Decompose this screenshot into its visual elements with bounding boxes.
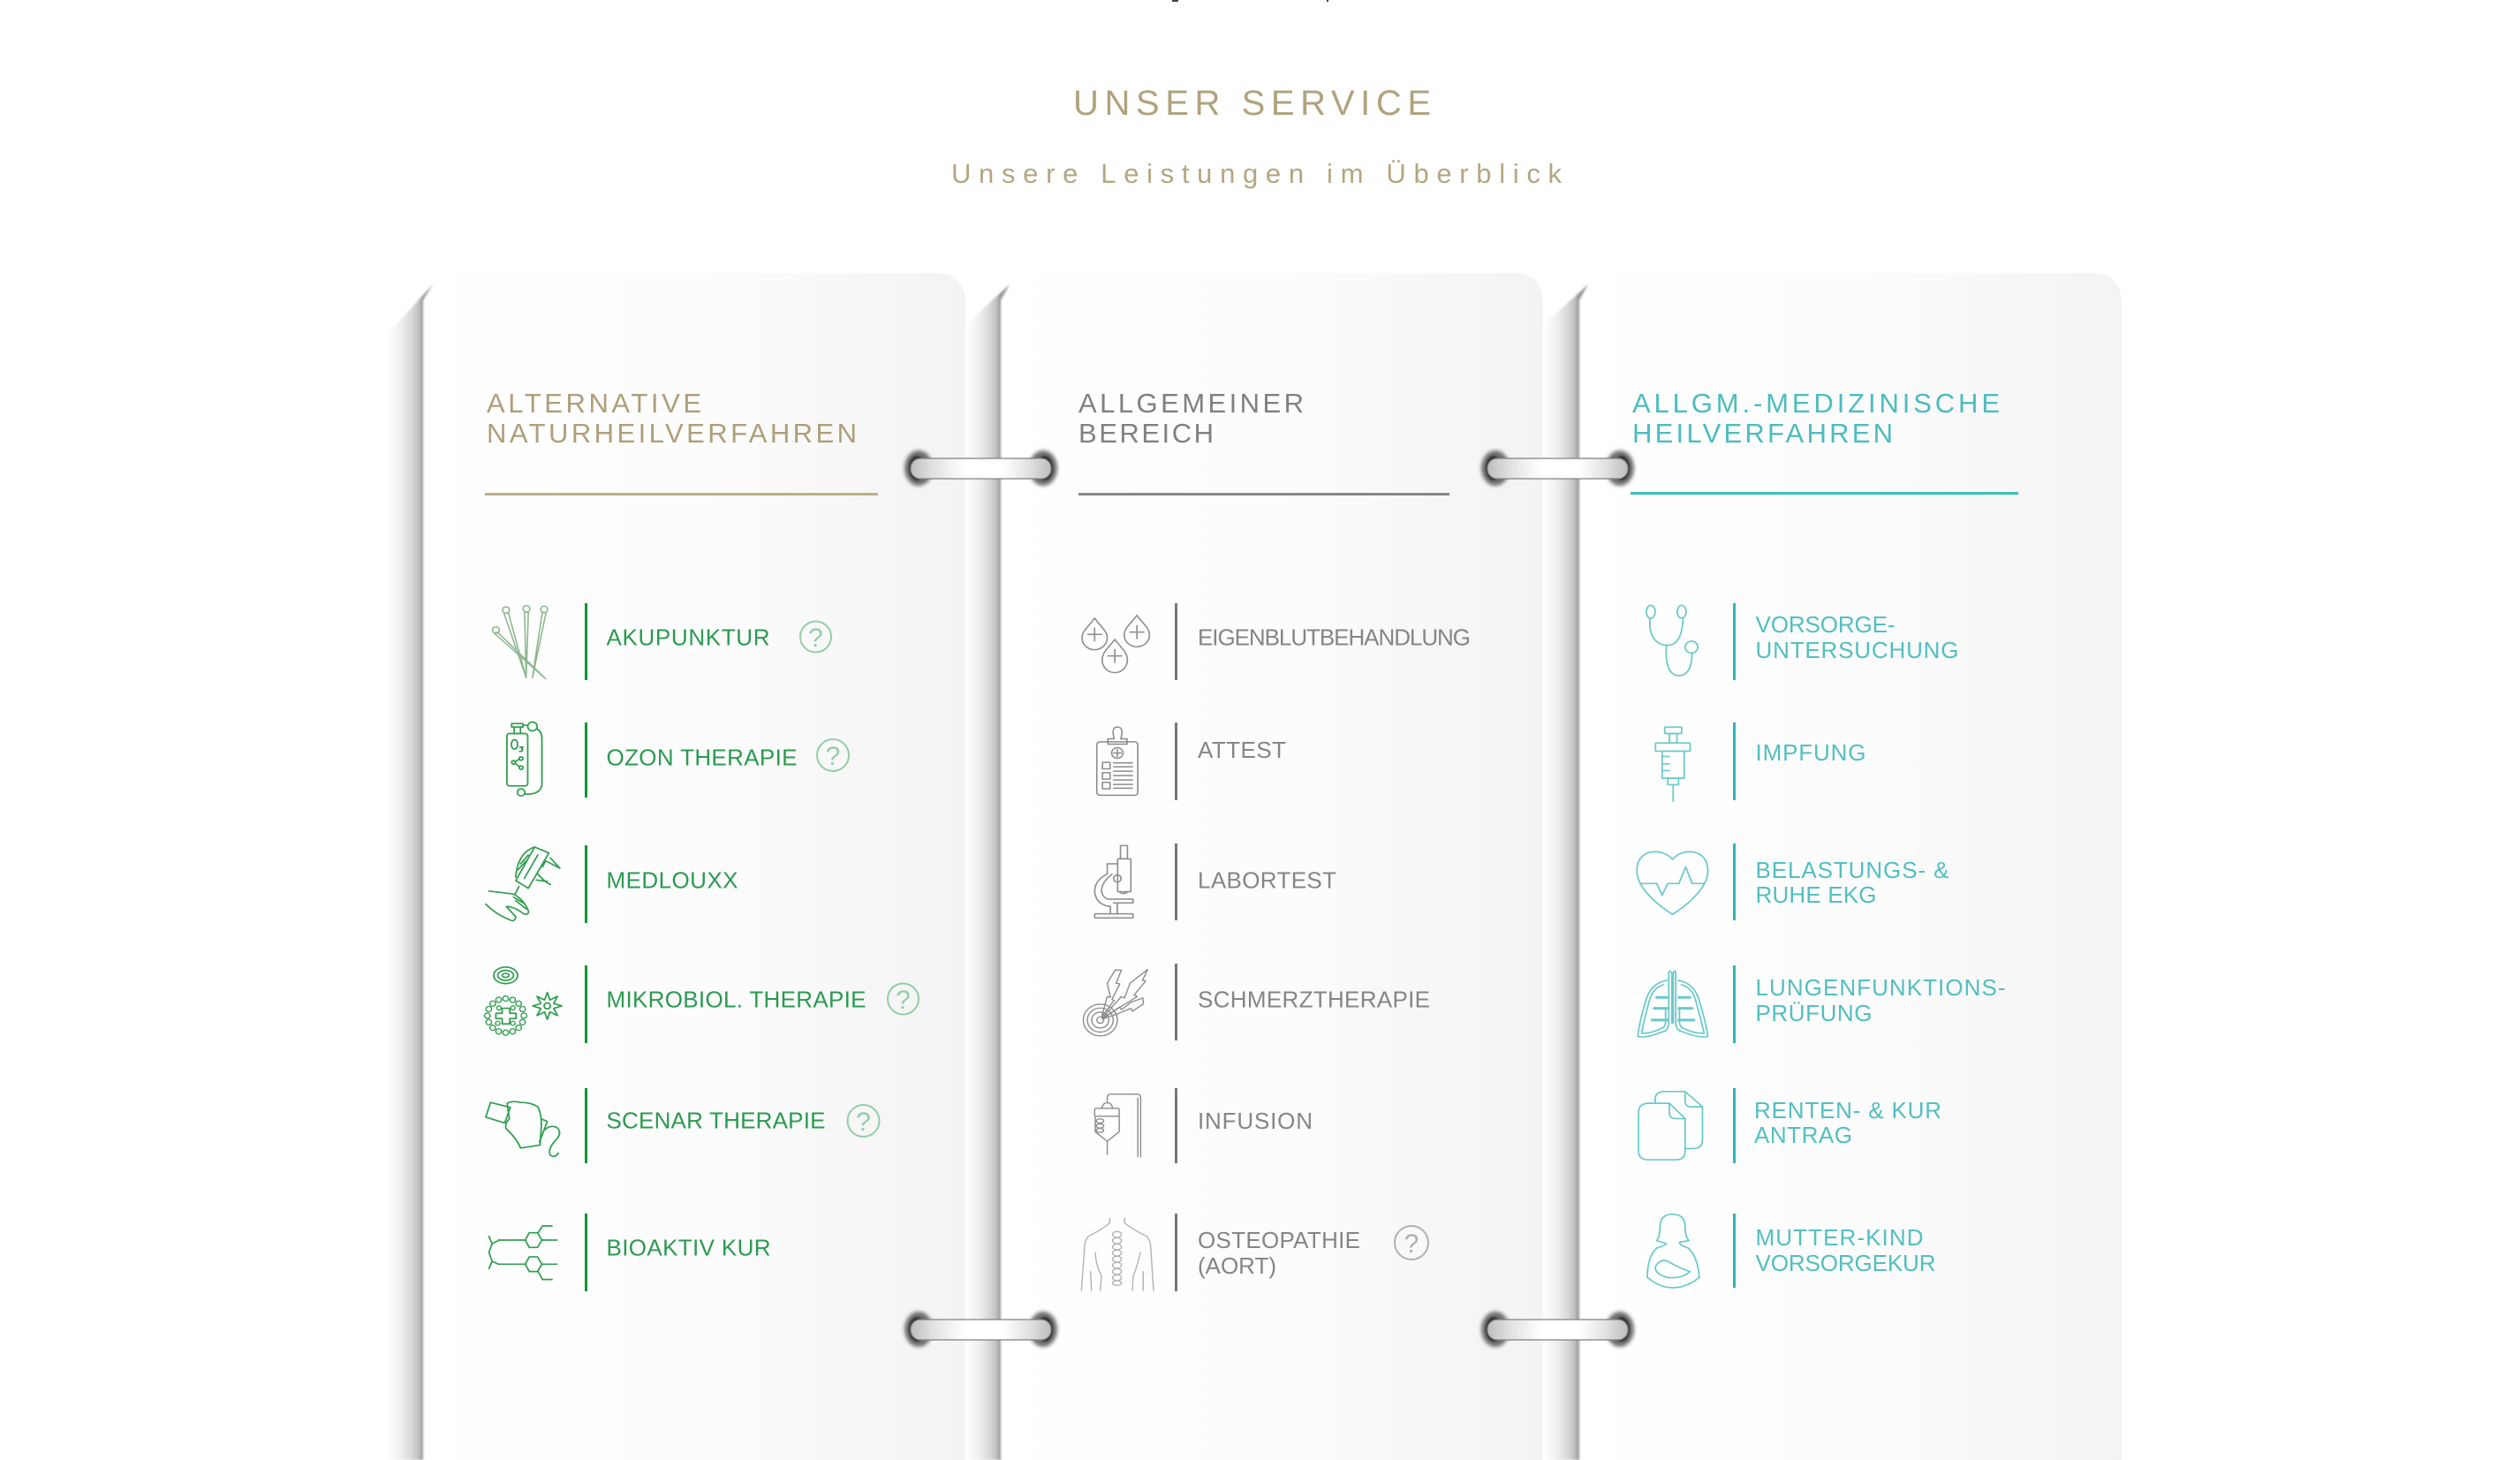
item: lungenfunktionsprüfung bbox=[1638, 965, 2005, 1043]
divider bbox=[1175, 603, 1177, 680]
help icon bbox=[817, 739, 849, 771]
label bbox=[1756, 857, 1949, 908]
heading bbox=[487, 388, 857, 449]
divider bbox=[585, 1214, 587, 1291]
icon: molecule bbox=[489, 1226, 556, 1280]
label bbox=[1756, 974, 2005, 1026]
divider bbox=[1733, 603, 1736, 680]
label: IMPFUNG bbox=[1756, 739, 1865, 766]
label: VORSORGEKUR bbox=[1756, 1250, 1936, 1276]
help icon bbox=[800, 622, 831, 653]
heading: ALLGM.-MEDIZINISCHE bbox=[1632, 388, 2000, 419]
cropped text fragments at top edge bbox=[1172, 0, 1328, 2]
divider bbox=[585, 603, 587, 680]
label: VORSORGE- bbox=[1756, 611, 1896, 638]
divider bbox=[1733, 1214, 1736, 1288]
label: EIGENBLUTBEHANDLUNG bbox=[1198, 624, 1471, 650]
label bbox=[1754, 1097, 1941, 1148]
icon: needles bbox=[492, 606, 548, 679]
divider bbox=[1733, 722, 1736, 800]
icon: hand with device bbox=[486, 847, 560, 920]
icon: pain target with bolts bbox=[1083, 970, 1147, 1036]
label: SCENAR THERAPIE bbox=[606, 1108, 825, 1134]
ring: top right bbox=[1481, 450, 1634, 486]
label: MIKROBIOL. THERAPIE bbox=[606, 986, 866, 1012]
help icon bbox=[848, 1105, 880, 1137]
heading: BEREICH bbox=[1078, 418, 1214, 449]
icon: microscope bbox=[1094, 845, 1133, 918]
help icon: ? bbox=[1404, 1229, 1419, 1259]
icon: infusion bag bbox=[1094, 1094, 1140, 1157]
heading: ALTERNATIVE bbox=[487, 388, 701, 419]
icon: stethoscope bbox=[1646, 605, 1698, 676]
label: RENTEN- & KUR bbox=[1754, 1097, 1941, 1123]
ring: bottom right bbox=[1481, 1312, 1634, 1347]
heading rule bbox=[485, 493, 878, 495]
divider bbox=[1175, 843, 1177, 920]
icon: blood drops bbox=[1082, 616, 1149, 673]
label: LABORTEST bbox=[1198, 867, 1336, 894]
label: ATTEST bbox=[1198, 737, 1286, 763]
divider bbox=[1733, 1088, 1736, 1163]
label: OSTEOPATHIE bbox=[1198, 1227, 1360, 1253]
label: INFUSION bbox=[1198, 1108, 1313, 1134]
item: eigenblutbehandlung bbox=[1082, 603, 1471, 680]
label: RUHE EKG bbox=[1756, 881, 1876, 908]
item: vorsorge-untersuchung bbox=[1646, 603, 1959, 680]
help icon: ? bbox=[896, 986, 911, 1015]
ring: top left bbox=[904, 450, 1057, 486]
divider bbox=[585, 845, 587, 923]
panel: allgemeiner bereich bbox=[965, 273, 1543, 1460]
divider bbox=[1733, 965, 1736, 1043]
label: (AORT) bbox=[1198, 1252, 1276, 1279]
panel: allgm.-medizinische heilverfahren bbox=[1543, 273, 2122, 1460]
icon: ozone cylinder bbox=[507, 722, 542, 796]
icon: microbes bbox=[485, 967, 562, 1035]
item: mikrobiol. therapie bbox=[485, 965, 919, 1043]
divider bbox=[1175, 1088, 1177, 1163]
item: medlouxx bbox=[486, 845, 738, 923]
divider bbox=[1175, 1214, 1177, 1291]
divider bbox=[585, 722, 587, 798]
label: UNTERSUCHUNG bbox=[1756, 637, 1959, 663]
heading rule bbox=[1078, 493, 1449, 495]
label bbox=[1756, 611, 1959, 663]
heading: HEILVERFAHREN bbox=[1632, 418, 1893, 449]
ring: bottom left bbox=[904, 1312, 1057, 1347]
icon: back with spine bbox=[1081, 1218, 1154, 1290]
heading rule bbox=[1631, 492, 2018, 495]
item: infusion bbox=[1094, 1088, 1313, 1163]
item: impfung bbox=[1655, 722, 1865, 801]
label: BELASTUNGS- & bbox=[1756, 857, 1949, 883]
page shadow bbox=[1543, 284, 1588, 1460]
item: osteopathie bbox=[1081, 1214, 1428, 1291]
heading bbox=[1078, 388, 1304, 449]
divider bbox=[585, 1088, 587, 1163]
label: PRÜFUNG bbox=[1756, 1000, 1873, 1026]
help icon: ? bbox=[826, 742, 840, 771]
icon: mother and child bbox=[1647, 1214, 1699, 1288]
divider bbox=[1175, 722, 1177, 800]
item: ozon therapie bbox=[507, 722, 849, 798]
divider bbox=[1733, 843, 1736, 920]
icon: lungs bbox=[1638, 971, 1708, 1037]
item: belastungs- & ruhe ekg bbox=[1637, 843, 1949, 920]
item: bioaktiv kur bbox=[489, 1214, 770, 1291]
panel: alternative naturheilverfahren bbox=[386, 273, 965, 1460]
item: labortest bbox=[1094, 843, 1336, 920]
title: UNSER SERVICE bbox=[1073, 84, 1431, 123]
item: scenar therapie bbox=[486, 1088, 880, 1163]
label: ANTRAG bbox=[1754, 1122, 1852, 1148]
divider bbox=[1175, 964, 1177, 1040]
label: AKUPUNKTUR bbox=[606, 624, 770, 650]
subtitle: Unsere Leistungen im Überblick bbox=[951, 158, 1562, 189]
label: LUNGENFUNKTIONS- bbox=[1756, 974, 2005, 1001]
help icon bbox=[888, 984, 919, 1015]
label: SCHMERZTHERAPIE bbox=[1198, 986, 1430, 1012]
page sheet bbox=[1579, 273, 2122, 1460]
item: mutter-kind vorsorgekur bbox=[1647, 1214, 1936, 1288]
help icon: ? bbox=[856, 1108, 871, 1137]
label bbox=[1756, 1224, 1936, 1276]
label: OZON THERAPIE bbox=[606, 744, 797, 770]
item: akupunktur bbox=[492, 603, 831, 680]
label bbox=[1198, 1227, 1360, 1279]
page shadow bbox=[965, 284, 1010, 1460]
page shadow bbox=[386, 284, 433, 1460]
label: MEDLOUXX bbox=[606, 867, 738, 894]
icon: syringe bbox=[1655, 727, 1691, 801]
divider bbox=[585, 965, 587, 1043]
icon: documents bbox=[1638, 1092, 1702, 1160]
heading bbox=[1632, 388, 2000, 449]
item: attest bbox=[1097, 722, 1286, 800]
page sheet bbox=[1001, 273, 1543, 1460]
icon: heart with ecg bbox=[1637, 851, 1708, 914]
heading: ALLGEMEINER bbox=[1078, 388, 1304, 419]
icon: clipboard bbox=[1097, 727, 1138, 795]
help icon bbox=[1395, 1226, 1428, 1260]
label: MUTTER-KIND bbox=[1756, 1224, 1924, 1251]
icon: hand with device bbox=[486, 1101, 559, 1156]
page sheet bbox=[423, 273, 965, 1460]
help icon: ? bbox=[808, 624, 823, 653]
heading: NATURHEILVERFAHREN bbox=[487, 418, 857, 449]
item: schmerztherapie bbox=[1083, 964, 1430, 1040]
label: BIOAKTIV KUR bbox=[606, 1235, 770, 1261]
item: renten- & kur antrag bbox=[1638, 1088, 1941, 1163]
